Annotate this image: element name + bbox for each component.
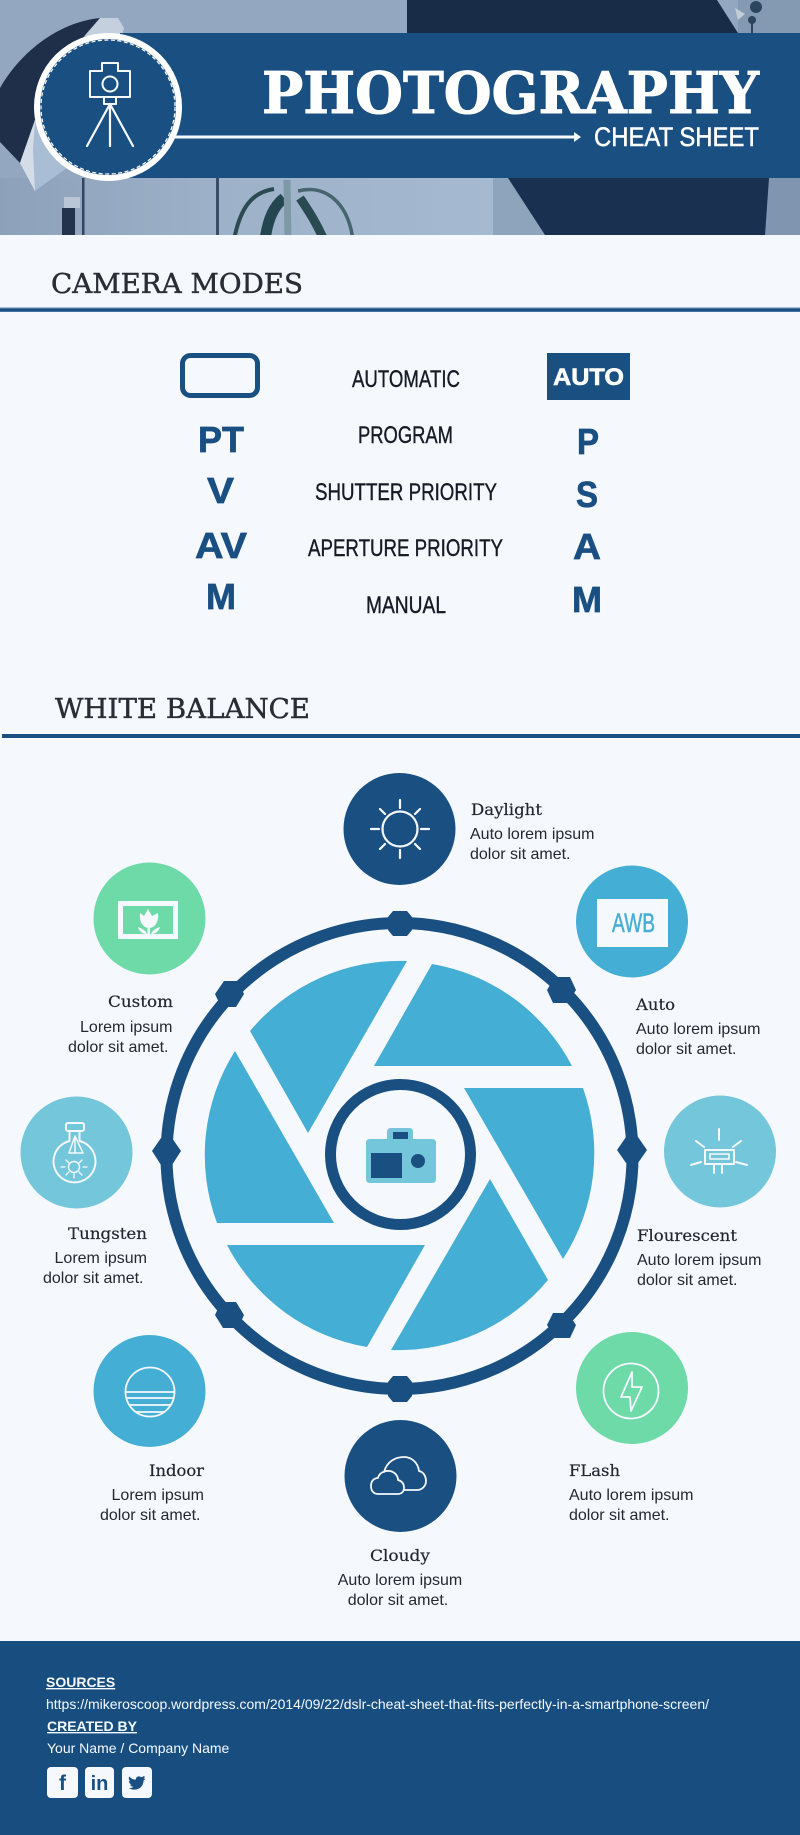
description: Auto lorem ipsum bbox=[470, 826, 594, 843]
panel: camera modes table bbox=[182, 353, 630, 620]
inner ring bbox=[330, 1084, 470, 1224]
description: dolor sit amet. bbox=[636, 1041, 736, 1058]
mode name: manual: MANUAL bbox=[366, 592, 446, 619]
label: FLash bbox=[569, 1461, 620, 1480]
source url: https://mikeroscoop.wordpress.com/2014/09/22/dslr-cheat-sheet-that-fits-perfectly-in-a-smartphone-screen/ bbox=[46, 1696, 709, 1712]
icon: sun bbox=[344, 773, 456, 885]
created by heading: CREATED BY bbox=[47, 1718, 138, 1734]
title banner bbox=[120, 33, 800, 178]
description: dolor sit amet. bbox=[637, 1272, 737, 1289]
item: flourescent bbox=[637, 1096, 776, 1289]
mode name: aperture priority: APERTURE PRIORITY bbox=[308, 535, 503, 562]
label: Auto bbox=[635, 995, 675, 1014]
badge: camera on tripod bbox=[37, 36, 179, 178]
description: dolor sit amet. bbox=[569, 1507, 669, 1524]
icon: blank auto dial mode bbox=[182, 356, 258, 396]
label: Cloudy bbox=[370, 1546, 430, 1565]
icon: AWB bbox=[576, 866, 688, 978]
item: tungsten bbox=[20, 1096, 147, 1287]
icon: striped globe bbox=[94, 1335, 206, 1447]
icon: linkedin: in bbox=[91, 1773, 108, 1795]
description: Lorem ipsum bbox=[80, 1019, 172, 1036]
icon: AWB: AWB bbox=[612, 908, 655, 938]
label: Daylight bbox=[471, 800, 543, 819]
nikon symbol: shutter priority: S bbox=[576, 474, 598, 515]
nikon symbol: program: P bbox=[577, 421, 599, 462]
arrow bbox=[170, 132, 581, 142]
description: Auto lorem ipsum bbox=[637, 1252, 762, 1269]
description: Auto lorem ipsum bbox=[338, 1572, 462, 1589]
description: Lorem ipsum bbox=[112, 1487, 204, 1504]
icon: tube light bbox=[664, 1096, 776, 1208]
sources heading: SOURCES bbox=[46, 1674, 115, 1690]
icon: lightning bolt bbox=[576, 1332, 688, 1444]
canon symbol: program: PT bbox=[198, 419, 244, 460]
description: Auto lorem ipsum bbox=[636, 1021, 760, 1038]
icon: facebook: f bbox=[59, 1772, 67, 1795]
outer ring bbox=[166, 923, 632, 1389]
description: dolor sit amet. bbox=[43, 1270, 143, 1287]
item: daylight bbox=[344, 773, 594, 885]
label: Indoor bbox=[149, 1461, 204, 1480]
mode name: shutter priority: SHUTTER PRIORITY bbox=[315, 479, 497, 506]
description: dolor sit amet. bbox=[348, 1592, 448, 1609]
subtitle text: CHEAT SHEET bbox=[594, 122, 759, 152]
icon: camera bbox=[366, 1128, 436, 1183]
label: Flourescent bbox=[637, 1226, 738, 1245]
description: Auto lorem ipsum bbox=[569, 1487, 694, 1504]
item: flash bbox=[569, 1332, 694, 1524]
footer panel bbox=[0, 1641, 800, 1835]
author name: Your Name / Company Name bbox=[47, 1740, 230, 1756]
diagram: aperture wheel bbox=[152, 911, 647, 1402]
heading: camera modes: CAMERA MODES bbox=[51, 269, 303, 300]
auto badge: AUTO bbox=[553, 364, 624, 391]
icon: bulb flask bbox=[20, 1096, 132, 1208]
canon symbol: aperture priority: AV bbox=[195, 525, 247, 566]
mode name: automatic: AUTOMATIC bbox=[352, 366, 460, 393]
mode name: program: PROGRAM bbox=[358, 422, 453, 449]
aperture blades bbox=[205, 961, 594, 1350]
canon symbol: shutter priority: V bbox=[207, 470, 234, 511]
canon symbol: manual: M bbox=[206, 576, 236, 617]
label: Tungsten bbox=[68, 1224, 147, 1243]
auto badge bbox=[547, 353, 630, 400]
title text: PHOTOGRAPHY bbox=[262, 60, 760, 127]
item: auto bbox=[576, 866, 760, 1058]
icon: facebook bbox=[47, 1767, 78, 1798]
icon: clouds bbox=[344, 1420, 456, 1532]
item: custom bbox=[68, 862, 206, 1056]
nikon symbol: aperture priority: A bbox=[573, 526, 601, 567]
description: dolor sit amet. bbox=[100, 1507, 200, 1524]
icon: framed flower bbox=[94, 862, 206, 974]
heading: white balance: WHITE BALANCE bbox=[55, 694, 310, 725]
item: indoor bbox=[94, 1335, 206, 1524]
item: cloudy bbox=[338, 1420, 462, 1609]
nikon symbol: manual: M bbox=[572, 579, 602, 620]
ring nodes bbox=[152, 911, 647, 1402]
label: Custom bbox=[108, 992, 173, 1011]
description: dolor sit amet. bbox=[68, 1039, 168, 1056]
icon: linkedin bbox=[85, 1767, 114, 1798]
icon: twitter bbox=[122, 1767, 152, 1798]
header photo background bbox=[0, 0, 800, 240]
description: Lorem ipsum bbox=[55, 1250, 147, 1267]
description: dolor sit amet. bbox=[470, 846, 570, 863]
